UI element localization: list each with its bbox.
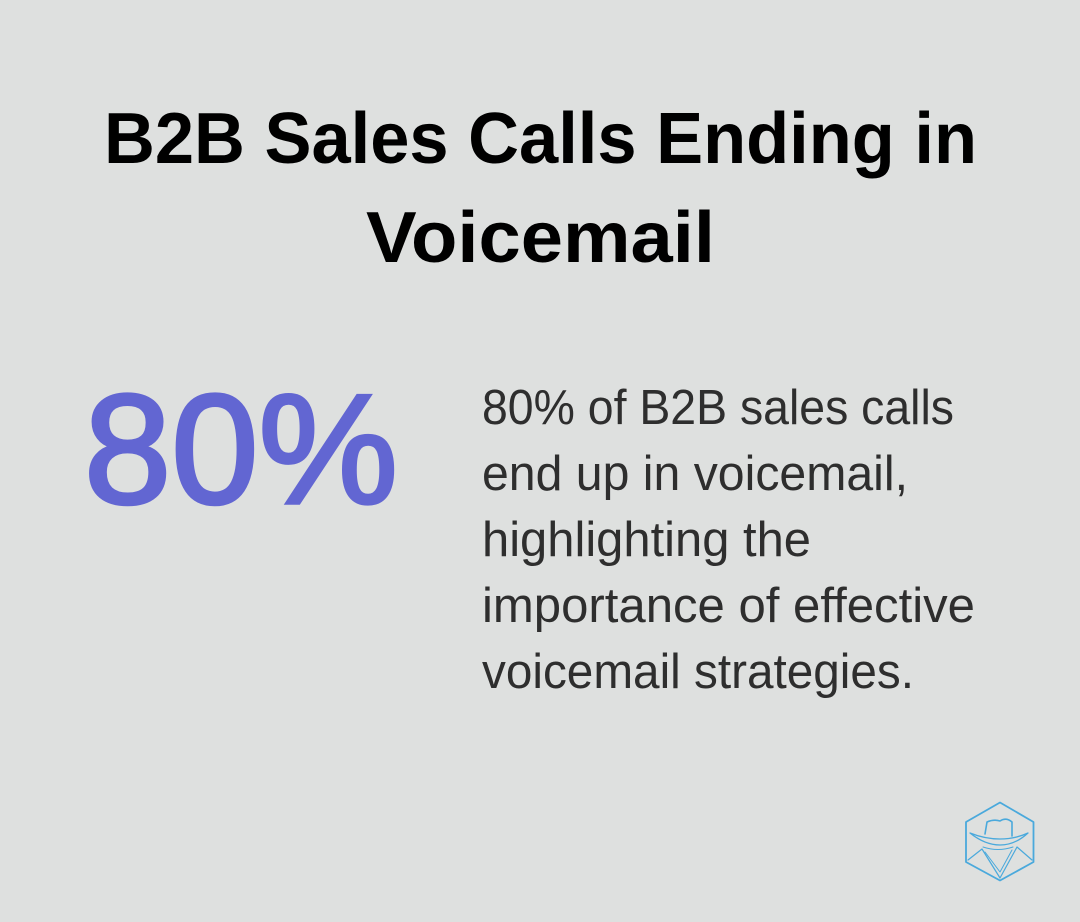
big stat: 80%: 80%: [84, 363, 398, 537]
title: Voicemail: [366, 198, 715, 278]
description text: [482, 381, 975, 699]
description text: end up in voicemail,: [482, 447, 908, 501]
description text: voicemail strategies.: [482, 645, 914, 699]
title: B2B Sales Calls Ending in: [104, 99, 977, 179]
description text: highlighting the: [482, 513, 811, 567]
description text: importance of effective: [482, 579, 975, 633]
icon: logo hexagon with hat detective: [966, 802, 1034, 880]
description text: 80% of B2B sales calls: [482, 381, 954, 435]
title: [104, 99, 977, 278]
